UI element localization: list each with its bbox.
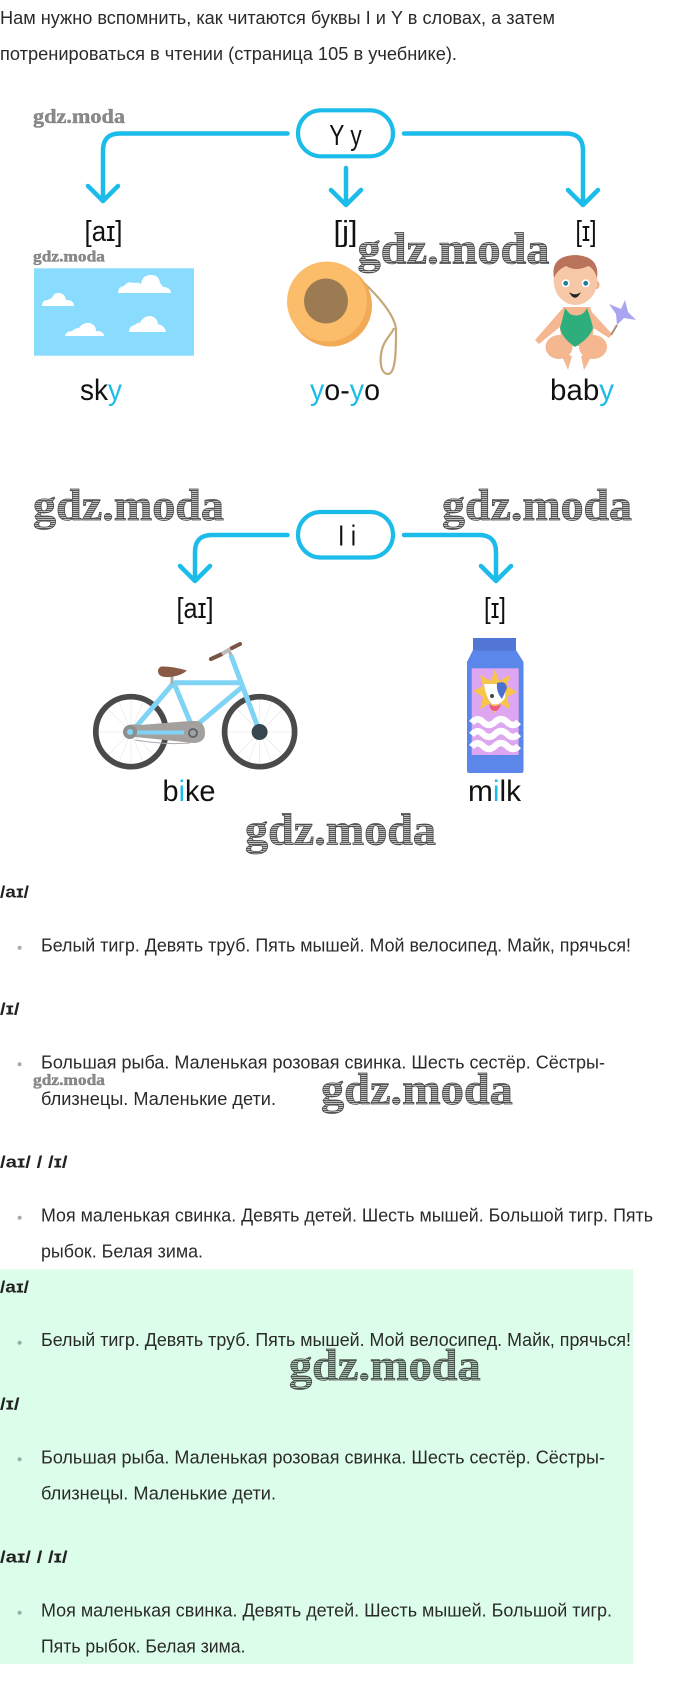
watermarks [33,106,632,1390]
pill: Y y [298,110,393,156]
heading: aɪ / ɪ: /aɪ/ / /ɪ/ [0,1152,68,1171]
illustration: baby [535,255,636,370]
list item: Пять рыбок. Белая зима. [41,1637,246,1657]
watermark: gdz.moda [321,1065,513,1114]
phonetic label: j: [j] [334,216,358,248]
illustration: bike [96,644,295,767]
phonetic label: aɪ: [aɪ] [84,216,122,248]
intro text: Нам нужно вспомнить, как читаются буквы I и Y в словах, а затем [0,8,555,28]
watermark small: gdz.moda [33,1072,105,1089]
phonetic label: ɪ: [ɪ] [484,593,506,625]
list item: близнецы. Маленькие дети. [41,1483,276,1503]
panel: answer [0,1269,633,1664]
illustration: yo-yo [287,262,396,374]
intro text: потренироваться в чтении (страница 105 в учебнике). [0,44,457,64]
word: baby: baby [550,374,614,407]
pill: I i: I i [338,520,356,552]
heading: ɪ: /ɪ/ [0,999,20,1018]
heading: ɪ: /ɪ/ [0,1394,20,1413]
diagram: letter I i [96,512,524,808]
watermark: gdz.moda [358,224,550,273]
watermark: gdz.moda [245,805,436,854]
list item: Большая рыба. Маленькая розовая свинка. Шесть сестёр. Сёстры- [41,1052,605,1072]
phonetic label: aɪ: [aɪ] [176,593,214,625]
list item: Моя маленькая свинка. Девять детей. Шесть мышей. Большой тигр. Пять [41,1206,653,1226]
heading: aɪ / ɪ: /aɪ/ / /ɪ/ [0,1548,68,1567]
illustration: sky [34,268,194,356]
list item [18,1601,612,1657]
watermark: gdz.moda [33,481,224,530]
pill: Y y: Y y [329,120,362,152]
arrow: to sky [88,134,288,201]
list item [18,1206,653,1262]
arrow: to yo-yo [331,168,361,205]
list item: рыбок. Белая зима. [41,1242,203,1262]
watermark: gdz.moda [442,481,632,530]
intro text [0,8,555,64]
list item [18,1052,605,1109]
word: yo-yo: yo-yo [310,374,380,407]
watermark small: gdz.moda [33,106,125,128]
heading: aɪ: /aɪ/ [0,1278,29,1297]
arrow: to bike [180,535,288,581]
list item: Моя маленькая свинка. Девять детей. Шесть мышей. Большой тигр. [41,1601,612,1621]
list item: Белый тигр. Девять труб. Пять мышей. Мой велосипед. Майк, прячься! [41,936,631,956]
illustration: milk carton [467,638,524,773]
arrow: to milk [404,535,511,581]
word: milk: milk [468,775,522,808]
reading exercise [0,882,653,1262]
list item: Большая рыба. Маленькая розовая свинка. Шесть сестёр. Сёстры- [41,1447,605,1467]
watermark: gdz.moda [289,1341,481,1390]
pill: I i [298,512,393,558]
word: bike: bike [162,775,216,808]
list item [18,1447,605,1503]
arrow: to baby [404,134,598,205]
watermark small: gdz.moda [33,249,105,266]
phonetic label: ɪ: [ɪ] [576,216,596,248]
list item: близнецы. Маленькие дети. [41,1089,276,1109]
heading: aɪ: /aɪ/ [0,882,29,901]
list item: Белый тигр. Девять труб. Пять мышей. Мой велосипед. Майк, прячься! [41,1330,631,1350]
word: sky: sky [80,374,122,407]
diagram: letter Y y [34,110,636,407]
